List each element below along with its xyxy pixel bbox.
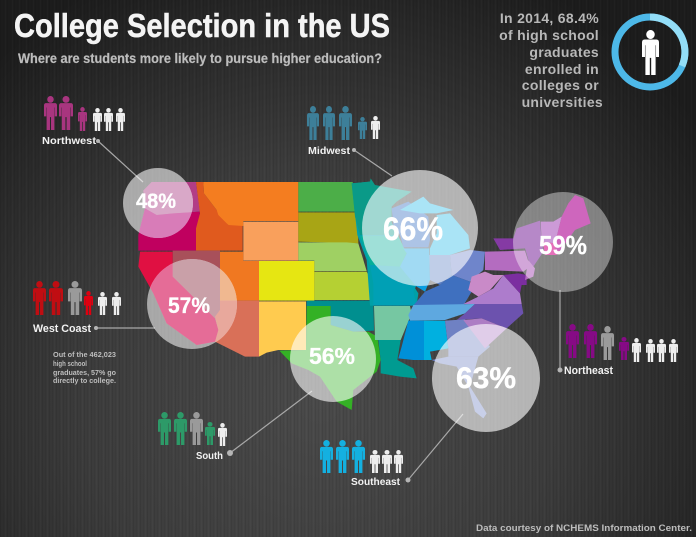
bubble: Northwest 48%	[123, 168, 193, 238]
bubble: Southeast 63%: 63%	[456, 362, 516, 395]
bubble: Midwest 66%: 66%	[383, 211, 443, 247]
people: Northwest	[44, 96, 125, 131]
label: South: South	[196, 450, 223, 462]
note: West Coast graduates: high school	[53, 359, 87, 368]
label: Midwest: Midwest	[308, 145, 351, 157]
people: South	[158, 412, 227, 446]
label: West Coast: West Coast	[33, 323, 91, 335]
bubble: Northwest 48%: 48%	[136, 190, 176, 213]
people: West Coast	[33, 281, 121, 315]
source credit: Data courtesy of NCHEMS Information Center.	[476, 523, 692, 533]
subtitle: Where are students more likely to pursue higher education?	[18, 50, 382, 66]
bubble: South 56%: 56%	[309, 343, 355, 369]
bubble: West Coast 57%: 57%	[168, 293, 210, 318]
icon: enrolment ring with person	[615, 17, 685, 87]
callout: national enrolment text: enrolled in	[525, 61, 599, 77]
callout: national enrolment text: of high school	[499, 27, 599, 43]
bubble: Northeast 59%	[513, 192, 613, 292]
note: West Coast graduates: graduates, 57% go	[53, 368, 116, 377]
people: Northeast	[566, 324, 678, 362]
bubble: Southeast 63%	[432, 324, 540, 432]
label: Southeast: Southeast	[351, 476, 400, 488]
note: West Coast graduates: directly to college.	[53, 376, 116, 385]
people: Midwest	[307, 106, 380, 140]
callout: national enrolment text: In 2014, 68.4%	[500, 10, 599, 26]
label: Northeast: Northeast	[564, 365, 613, 377]
title: College Selection in the US	[14, 7, 390, 44]
callout: national enrolment text: universities	[522, 94, 603, 110]
map of the United States	[138, 178, 591, 418]
note: West Coast graduates: Out of the 462,023	[53, 350, 116, 359]
note: West Coast graduates	[53, 350, 116, 385]
bubble: Midwest 66%	[362, 170, 478, 286]
callout: national enrolment text: colleges or	[522, 77, 599, 93]
people: Southeast	[320, 440, 403, 473]
bubble: Northeast 59%: 59%	[539, 230, 587, 260]
bubble: West Coast 57%	[147, 259, 237, 349]
label: Northwest: Northwest	[42, 135, 97, 147]
callout: national enrolment text	[499, 10, 603, 110]
bubble: South 56%	[290, 316, 376, 402]
connector lines	[94, 139, 562, 482]
callout: national enrolment text: graduates	[529, 44, 599, 60]
